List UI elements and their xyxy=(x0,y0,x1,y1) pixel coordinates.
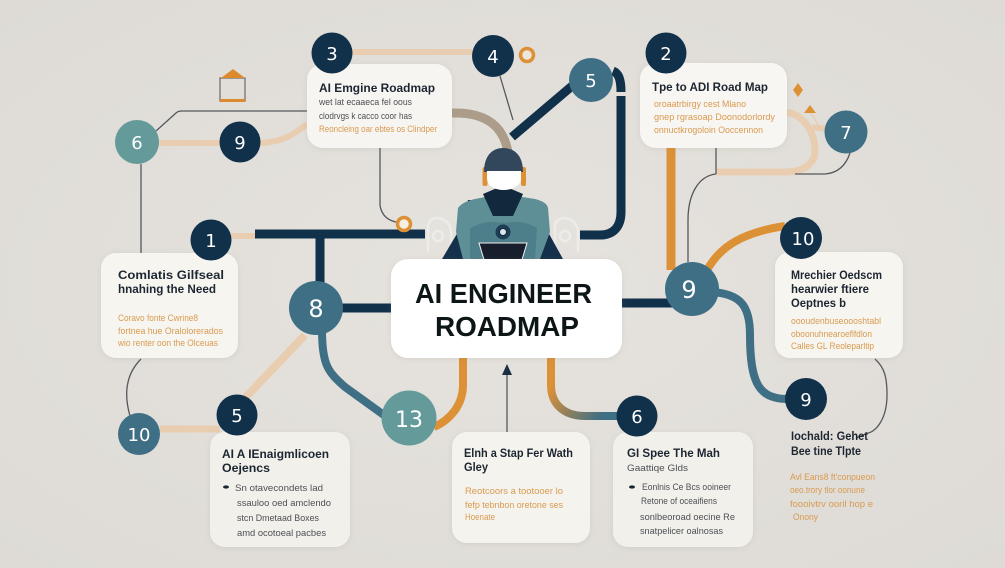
body text: Eonlnis Ce Bcs ooineer xyxy=(642,482,731,493)
body text: Avl Eans8 ft'conpueon xyxy=(790,472,875,483)
node 10 right: 10 xyxy=(792,229,814,250)
body text: Reotcoors a tootooer lo xyxy=(465,486,563,497)
body text: oboonuhnearoeflfdlon xyxy=(791,329,872,340)
node 6 left: 6 xyxy=(131,133,143,154)
connector network xyxy=(127,52,887,438)
body text: wet lat ecaaeca fel oous xyxy=(318,97,412,108)
node 9 top left: 9 xyxy=(234,133,246,154)
body text: snatpelicer oalnosas xyxy=(640,526,723,537)
heading xyxy=(118,270,224,296)
body text xyxy=(654,99,775,136)
node 10 right xyxy=(780,217,822,259)
heading: hearwier ftiere xyxy=(791,284,869,296)
icon: orange ring left xyxy=(398,218,410,230)
body text: Retone of oceaifiens xyxy=(641,496,717,507)
heading xyxy=(222,449,329,475)
body text xyxy=(318,97,437,135)
body text: fefp tebnbon oretone ses xyxy=(465,500,563,511)
icon: orange diamond xyxy=(793,83,803,97)
headphones left xyxy=(482,167,488,186)
connector: teal lines xyxy=(322,292,786,418)
heading: Tpe to ADI Road Map xyxy=(652,82,768,94)
node 5 bottom: 5 xyxy=(231,406,243,427)
body text: stcn Dmetaad Boxes xyxy=(237,513,319,524)
bullet xyxy=(629,485,635,489)
node 10 left xyxy=(118,413,160,455)
main title xyxy=(415,278,592,342)
body text: foooivtrv ooril hop e xyxy=(790,499,873,510)
node 7 xyxy=(824,110,868,154)
heading: Gley xyxy=(464,462,489,474)
body text: amd ocotoeal pacbes xyxy=(237,528,326,539)
node 2 xyxy=(646,32,686,74)
heading: Bee tine Tlpte xyxy=(791,446,861,458)
node 13: 13 xyxy=(395,408,423,433)
body text: fortnea hue Oralolorerados xyxy=(118,326,223,337)
card: bottom left xyxy=(210,432,350,547)
connector: taupe line xyxy=(452,113,508,152)
node 9 center right: 9 xyxy=(681,276,697,304)
body text: wio renter oon the Olceuas xyxy=(117,338,218,349)
body text: sonlbeoroad oecine Re xyxy=(640,512,735,523)
body text: Reoncleing oar ebtes os Clindper xyxy=(319,124,437,135)
heading: Mrechier Oedscm xyxy=(791,270,882,282)
body text xyxy=(640,482,735,537)
node 8: 8 xyxy=(308,295,324,323)
node 6 left xyxy=(115,120,159,164)
node 10 left: 10 xyxy=(128,425,150,446)
node 7: 7 xyxy=(840,123,852,144)
heading: Oeptnes b xyxy=(791,298,846,310)
body text: Hoenate xyxy=(465,512,495,523)
node 13 xyxy=(382,390,436,446)
body text: Sn otavecondets lad xyxy=(235,483,323,494)
main title: AI ENGINEER xyxy=(415,278,592,309)
node 4: 4 xyxy=(487,47,499,68)
node 2: 2 xyxy=(660,44,672,65)
node 5 top: 5 xyxy=(585,71,597,92)
card: bottom right xyxy=(613,432,753,547)
badge core xyxy=(500,228,506,236)
node 1 xyxy=(190,220,232,260)
connector: orange lines xyxy=(434,148,785,427)
center title card xyxy=(391,259,622,358)
headphones right xyxy=(521,167,526,186)
teal torso xyxy=(456,196,550,259)
icon: arrow head xyxy=(502,364,512,375)
heading: Elnh a Stap Fer Wath xyxy=(464,448,573,460)
heading: AI A IEnaigmlicoen xyxy=(222,449,329,461)
node 9 lower right xyxy=(785,378,827,420)
heading: Comlatis Gilfseal xyxy=(118,270,224,282)
node 8 xyxy=(289,281,343,335)
heading: Iochald: Gehet xyxy=(791,431,868,443)
body text: oooudenbuseoooshtabl xyxy=(791,316,881,327)
node 6 bottom: 6 xyxy=(631,407,643,428)
node 5 bottom xyxy=(216,394,258,436)
helmet xyxy=(484,148,523,172)
heading xyxy=(791,270,882,310)
body text xyxy=(465,486,563,523)
laptop xyxy=(479,243,527,263)
body text xyxy=(117,313,223,349)
node 5 top xyxy=(569,58,613,102)
node 9 lower right: 9 xyxy=(800,390,812,411)
heading xyxy=(791,431,868,458)
connector: navy lines xyxy=(255,71,672,308)
icon: orange triangle xyxy=(804,105,820,128)
card: left xyxy=(101,253,238,358)
white face xyxy=(487,171,521,190)
connector: thin grey lines xyxy=(127,76,887,438)
body text: Calles GL Reoleparltip xyxy=(791,341,874,352)
node 6 bottom xyxy=(616,396,658,436)
body text: ssauloo oed amclendo xyxy=(237,498,331,509)
main title: ROADMAP xyxy=(435,311,579,342)
body text xyxy=(790,472,875,523)
navy arms xyxy=(442,200,563,259)
icon: orange ring top xyxy=(520,48,534,62)
card: Tpe to ADI Road Map xyxy=(640,63,787,148)
node 3: 3 xyxy=(326,44,338,65)
node 9 center right xyxy=(665,262,719,316)
body text: oroaatrbirgy cest Mlano xyxy=(654,99,746,110)
card: bottom middle xyxy=(452,432,590,543)
heading: Gaattiqe Glds xyxy=(627,463,688,474)
chest badge xyxy=(494,224,512,240)
icon: document with orange roof xyxy=(220,69,245,102)
bullet xyxy=(223,485,229,489)
illustration: engineer at laptop xyxy=(428,148,578,263)
neck collar xyxy=(483,188,523,216)
node 3 xyxy=(312,32,352,74)
node 1: 1 xyxy=(205,231,217,252)
body text xyxy=(791,316,881,352)
heading: AI Emgine Roadmap xyxy=(319,83,435,95)
body text xyxy=(235,483,331,539)
node 9 top left xyxy=(220,122,260,162)
heading xyxy=(627,448,720,474)
node 4 xyxy=(472,35,514,77)
heading: GI Spee The Mah xyxy=(627,448,720,460)
connector: peach lines xyxy=(158,52,826,429)
faint arm outlines xyxy=(428,218,578,252)
heading xyxy=(464,448,573,474)
body text: oeo.trory tlor oonune xyxy=(790,485,865,496)
body text: gnep rgrasoap Doonodorlordy xyxy=(654,112,775,123)
card: right xyxy=(775,252,903,358)
heading: Oejencs xyxy=(222,463,270,475)
body text: Onony xyxy=(793,512,818,523)
connector: orange to teal gradient xyxy=(551,358,618,416)
card: AI Engine Roadmap xyxy=(307,64,452,148)
heading: hnahing the Need xyxy=(118,284,216,296)
chest shading xyxy=(470,222,537,259)
body text: Coravo fonte Cwrine8 xyxy=(118,313,198,324)
text block: lower right, no card xyxy=(790,431,875,523)
body text: clodrvgs k cacco coor has xyxy=(319,111,412,122)
body text: onnuctkrogoloin Ooccennon xyxy=(654,125,763,136)
